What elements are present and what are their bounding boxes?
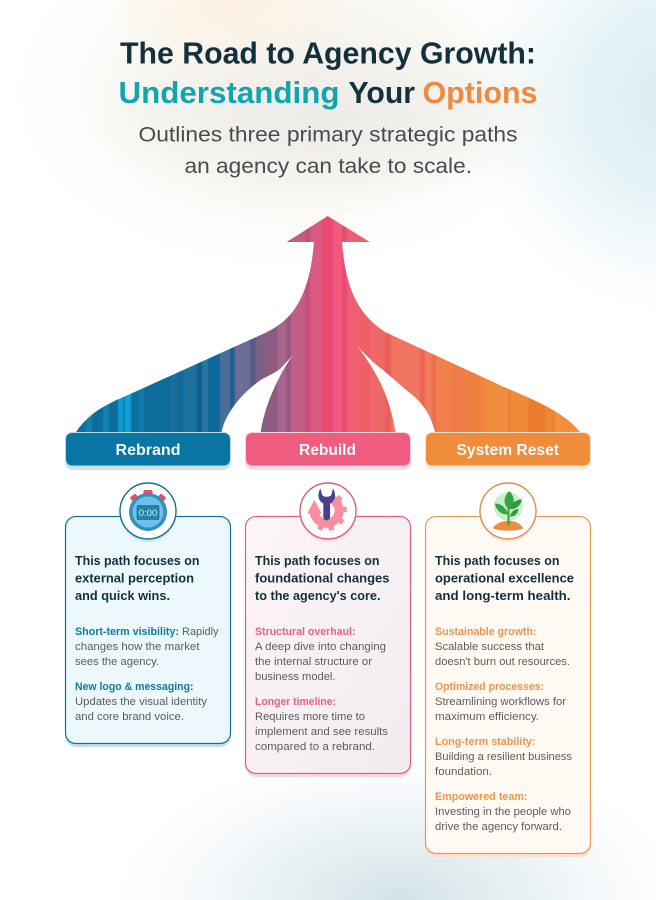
- text: Rebuild points: Structural overhaul:: [255, 626, 356, 638]
- text: Rebrand points: Short-term visibility:: [75, 626, 179, 638]
- text: System Reset points: maximum efficiency.: [435, 711, 539, 723]
- arrow: three paths merging upward: [70, 210, 585, 440]
- text: Rebuild points: Requires more time to: [255, 711, 365, 723]
- heading: System Reset summary: and long-term health.: [435, 588, 570, 603]
- text: System Reset points: doesn't burn out resources.: [435, 656, 570, 668]
- text: System Reset points: [435, 626, 573, 833]
- button: System Reset: [425, 432, 591, 470]
- heading: Rebuild summary: foundational changes: [255, 570, 390, 586]
- text: System Reset points: foundation.: [435, 766, 492, 778]
- text: Rebrand points: [75, 626, 219, 723]
- text: Rebuild points: [255, 626, 389, 753]
- text: System Reset points: Scalable success that: [435, 641, 544, 653]
- text: System Reset points: Optimized processes:: [435, 681, 544, 693]
- text: System Reset points: Investing in the people who: [435, 806, 571, 818]
- text: System Reset points: Building a resilient business: [435, 751, 573, 763]
- text: Rebuild points: implement and see results: [255, 726, 389, 738]
- icon: sprout: [493, 491, 523, 531]
- text: System Reset points: Streamlining workflows for: [435, 696, 566, 708]
- subtitle: [138, 122, 518, 178]
- text: System Reset points: drive the agency forward.: [435, 821, 562, 833]
- panel: Rebuild: [245, 483, 411, 777]
- subtitle: an agency can take to scale.: [184, 154, 472, 178]
- title: Your: [348, 75, 415, 110]
- panel: System Reset: [425, 483, 591, 857]
- text: System Reset points: Empowered team:: [435, 791, 528, 803]
- panel: Rebrand: [65, 483, 231, 747]
- button: System Reset: System Reset: [456, 442, 560, 459]
- title: The Road to Agency Growth:: [120, 36, 536, 70]
- heading: Rebrand summary: [75, 553, 200, 603]
- subtitle: Outlines three primary strategic paths: [138, 122, 518, 146]
- text: System Reset points: Long-term stability:: [435, 736, 536, 748]
- heading: Rebrand summary: external perception: [75, 570, 194, 586]
- title: Options: [422, 75, 538, 110]
- text: Rebrand points: Rapidly: [182, 626, 219, 638]
- button: Rebuild: Rebuild: [299, 442, 356, 459]
- heading: Rebuild summary: to the agency's core.: [255, 588, 380, 603]
- title: [118, 36, 538, 110]
- button: Rebuild: [245, 432, 411, 470]
- heading: Rebuild summary: [255, 553, 390, 603]
- heading: Rebuild summary: This path focuses on: [255, 553, 380, 568]
- heading: System Reset summary: This path focuses on: [435, 553, 560, 568]
- icon: gear with wrench: [308, 488, 347, 531]
- text: Rebuild points: Longer timeline:: [255, 696, 336, 708]
- text: Rebrand points: changes how the market: [75, 641, 200, 653]
- button: Rebrand: [65, 432, 231, 470]
- heading: System Reset summary: operational excellence: [435, 570, 574, 586]
- text: Rebuild points: A deep dive into changing: [255, 641, 386, 653]
- heading: Rebrand summary: and quick wins.: [75, 588, 170, 603]
- text: Rebuild points: compared to a rebrand.: [255, 741, 375, 753]
- title: Understanding: [118, 75, 340, 110]
- text: Rebrand points: Updates the visual identity: [75, 696, 208, 708]
- text: System Reset points: Sustainable growth:: [435, 626, 536, 638]
- button: Rebrand: Rebrand: [116, 442, 180, 459]
- text: Rebuild points: the internal structure or: [255, 656, 372, 668]
- icon: stopwatch: 0:00: [139, 508, 157, 519]
- heading: System Reset summary: [435, 553, 574, 603]
- icon: stopwatch: [129, 490, 167, 531]
- text: Rebrand points: New logo & messaging:: [75, 681, 194, 693]
- heading: Rebrand summary: This path focuses on: [75, 553, 200, 568]
- text: Rebrand points: sees the agency.: [75, 656, 159, 668]
- text: Rebuild points: business model.: [255, 671, 336, 683]
- text: Rebrand points: and core brand voice.: [75, 711, 184, 723]
